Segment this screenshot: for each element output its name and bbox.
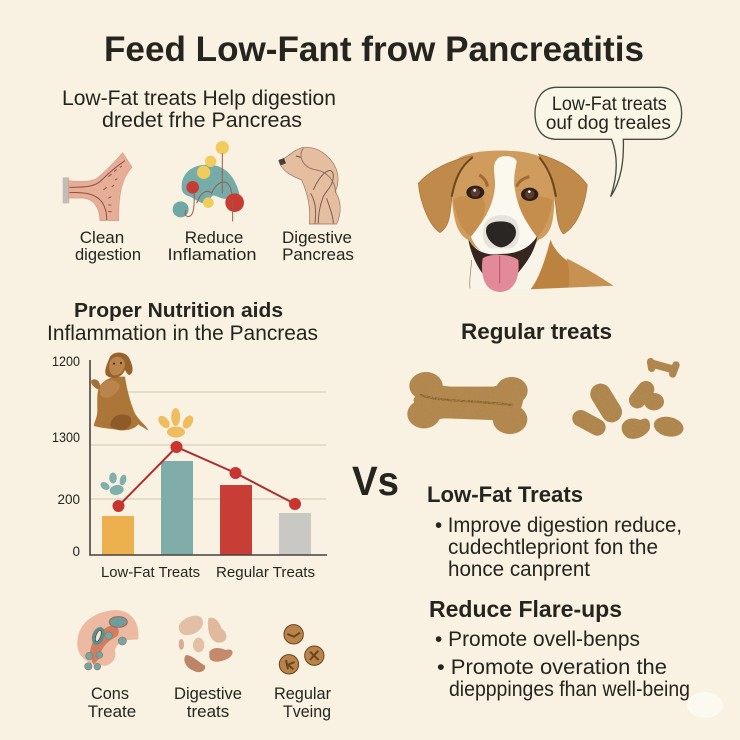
- y axis labels: 200: [57, 492, 80, 507]
- label: cons treate: Treate: [88, 702, 136, 721]
- text block: low-fat treats: [427, 482, 682, 581]
- line series: [112, 441, 301, 512]
- label: digestive treats: [174, 684, 242, 721]
- dog eyes: [466, 186, 538, 201]
- heading: Regular treats: [461, 319, 612, 344]
- heading: Low-Fat Treats: [427, 482, 583, 507]
- subheading: Low-Fat treats Help digestion: [62, 87, 336, 110]
- text block: reduce flare-ups: [429, 596, 690, 701]
- label: digestive treats: Digestive: [174, 684, 242, 703]
- icon: small biscuits: [581, 362, 685, 439]
- label: clean digestion: digestion: [75, 245, 141, 264]
- dog head: [452, 151, 554, 257]
- label: regular tveing: Regular: [274, 684, 331, 703]
- y axis labels: 0: [72, 544, 80, 559]
- speech bubble: [535, 87, 682, 197]
- bullet list: [435, 514, 682, 581]
- icon: orange paw: [156, 408, 195, 438]
- label: reduce inflammation: [168, 228, 256, 264]
- illustration: happy dog: [418, 151, 613, 292]
- icon: cons treats organ: [77, 610, 139, 670]
- bullet list: • Promote ovell-benps: [435, 628, 640, 651]
- speech bubble: Low-Fat treats: [552, 94, 667, 115]
- subheading: [62, 87, 336, 132]
- icon: digestive treats: [179, 616, 233, 672]
- bullet list: honce canprent: [448, 558, 590, 581]
- dog mouth and tongue: [468, 236, 537, 292]
- heading: Reduce Flare-ups: [429, 596, 622, 622]
- bullet list: • Promote overation the: [437, 656, 667, 679]
- label: cons treate: [88, 684, 136, 721]
- panel: benefits of low-fat treats: [62, 87, 354, 264]
- x axis labels: [101, 564, 315, 581]
- panel: nutrition chart: [47, 300, 327, 581]
- bar chart: [102, 461, 311, 555]
- chart heading: Inflammation in the Pancreas: [47, 322, 318, 345]
- bullet list: cudechtlepriont fon the: [448, 536, 658, 559]
- icon: sitting dog: [91, 352, 149, 431]
- label: clean digestion: [75, 228, 141, 264]
- dog ears: [418, 154, 587, 234]
- subheading: dredet frhe Pancreas: [102, 109, 302, 132]
- y axis labels: [52, 354, 80, 559]
- label: digestive pancreas: [282, 228, 354, 264]
- speech bubble: ouf dog treales: [546, 113, 671, 134]
- label: regular tveing: [274, 684, 331, 721]
- label: regular tveing: Tveing: [283, 702, 331, 721]
- chart heading: [47, 300, 318, 345]
- bullet list: [435, 628, 690, 701]
- label: cons treate: Cons: [91, 684, 129, 703]
- icon: inflammation: [173, 141, 244, 221]
- icon: regular treats kibble: [279, 625, 324, 674]
- y axis labels: 1200: [52, 354, 80, 369]
- panel: bottom icons: [77, 610, 331, 721]
- label: clean digestion: Clean: [80, 228, 124, 247]
- bullet list: diepppinges fhan well-being: [449, 678, 690, 701]
- label: digestive pancreas: Pancreas: [282, 245, 354, 264]
- x axis labels: Regular Treats: [216, 564, 315, 581]
- versus label: Vs: [352, 458, 399, 504]
- label: reduce inflammation: Inflamation: [168, 245, 256, 264]
- y axis labels: 1300: [52, 430, 80, 445]
- icon: dog profile: [279, 147, 340, 224]
- x axis labels: Low-Fat Treats: [101, 564, 200, 581]
- icon: large bone biscuit: [407, 372, 528, 434]
- title: Feed Low-Fant frow Pancreatitis: [104, 30, 644, 69]
- label: digestive treats: treats: [187, 702, 229, 721]
- icon: teal paw: [99, 472, 128, 496]
- label: digestive pancreas: Digestive: [282, 228, 352, 247]
- panel: regular treats: [407, 319, 685, 439]
- label: reduce inflammation: Reduce: [185, 228, 243, 247]
- dog neck and chest: [470, 237, 613, 289]
- chart heading: Proper Nutrition aids: [74, 300, 283, 322]
- dog nose: [486, 221, 516, 247]
- watermark sparkle: [687, 692, 723, 718]
- bullet list: • Improve digestion reduce,: [435, 514, 682, 537]
- icon: digestive tract: [63, 153, 132, 221]
